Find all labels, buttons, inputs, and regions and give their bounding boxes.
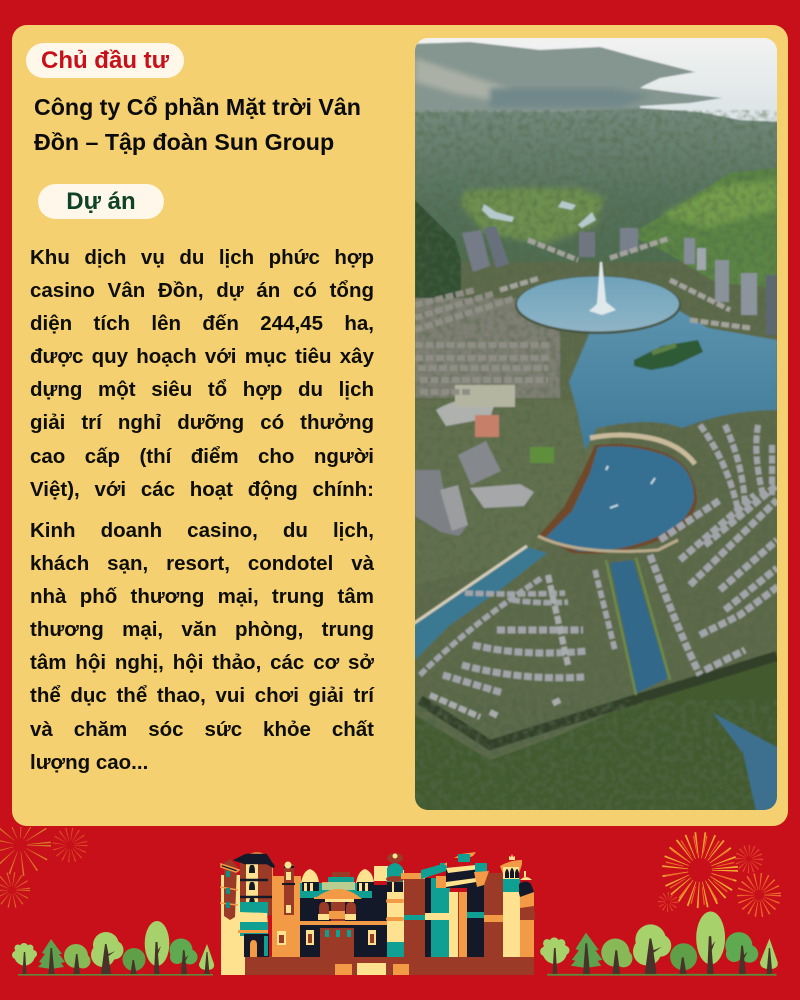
heading: Chủ đầu tư (26, 43, 184, 78)
text block: main activities: khách sạn, resort, condotel và (30, 552, 374, 575)
fireworks: top left (0, 827, 88, 908)
photo: golf ponds (482, 201, 596, 228)
photo: central canal (610, 560, 668, 693)
photo: villa rows (415, 238, 780, 717)
palace: right turret (520, 892, 534, 957)
photo: forest texture (415, 109, 777, 560)
photo: towers (415, 226, 777, 536)
text block: investor name (34, 94, 361, 155)
photo: lower lake (539, 444, 697, 554)
photo: fountain (589, 262, 616, 315)
photo: island (634, 340, 703, 370)
palace: cream block (374, 866, 388, 881)
text block: project description: được quy hoạch với mục tiêu xây (30, 345, 374, 368)
palace: top pavilion (444, 852, 476, 867)
panel: main card (12, 25, 788, 826)
heading: Dự án: Dự án (66, 188, 136, 215)
palace: left balcony tower (224, 859, 237, 920)
palace: right brown walls (404, 873, 426, 957)
palace illustration (220, 852, 535, 975)
text block: project description: dựng một siêu tổ hợp du lịch (30, 378, 374, 401)
text block: main activities: và chăm sóc sức khỏe chất (30, 718, 374, 741)
photo: forested hills (415, 107, 777, 263)
photo: bottom forest (410, 658, 782, 815)
palace: brown base (245, 956, 534, 975)
text block: project description: diện tích lên đến 244,45 ha, (30, 312, 374, 335)
text block: project description (30, 246, 374, 501)
palace: central pavilion (314, 889, 362, 899)
text block: investor name: Công ty Cổ phần Mặt trời Vân (34, 94, 361, 120)
photo: land base (415, 262, 777, 761)
heading: Chủ đầu tư: Chủ đầu tư (41, 47, 169, 74)
heading: Dự án (38, 184, 164, 219)
photo: left canal (410, 547, 547, 665)
palace: main tower (240, 852, 273, 913)
photo: upper circular lake (514, 292, 681, 335)
text block: main activities: lượng cao... (30, 751, 148, 774)
palace: minaret (387, 870, 404, 957)
text block: main activities: tâm hội nghị, hội thảo, các cơ sở (30, 651, 374, 674)
palace: teal tower (425, 878, 450, 957)
text block: project description: Việt), với các hoạt động chính: (30, 478, 374, 501)
palace: cream wall (221, 875, 246, 975)
text block: project description: giải trí nghỉ dưỡng có thưởng (30, 411, 374, 434)
palace: central hall (300, 885, 388, 957)
text block: main activities: Kinh doanh casino, du lịch, (30, 519, 374, 542)
text block: main activities: thể dục thể thao, vui chơi giải trí (30, 684, 374, 707)
palace: columns (449, 892, 458, 957)
palace: cream roof and gate (239, 912, 268, 925)
photo: distant headland (410, 42, 722, 118)
text block: main activities (30, 519, 374, 774)
photo: lower right river (712, 712, 777, 810)
text block: main activities: nhà phố thương mại, trung tâm (30, 585, 374, 608)
fireworks: right (658, 832, 781, 917)
photo: big bay (569, 310, 777, 450)
text block: project description: cao cấp (thí điểm cho người (30, 445, 374, 468)
photo: sky and sea (417, 38, 777, 123)
aerial photo illustration (415, 38, 777, 810)
trees: left row (12, 921, 214, 976)
palace: right tower (503, 892, 520, 957)
trees: right row (540, 912, 778, 976)
text block: project description: Khu dịch vụ du lịch phức hợp (30, 246, 374, 269)
palace: orange wing (272, 876, 301, 957)
text block: investor name: Đồn – Tập đoàn Sun Group (34, 129, 334, 155)
text block: project description: casino Vân Đồn, dự án có tổng (30, 279, 374, 302)
text block: main activities: thương mại, văn phòng, trung (30, 618, 374, 641)
